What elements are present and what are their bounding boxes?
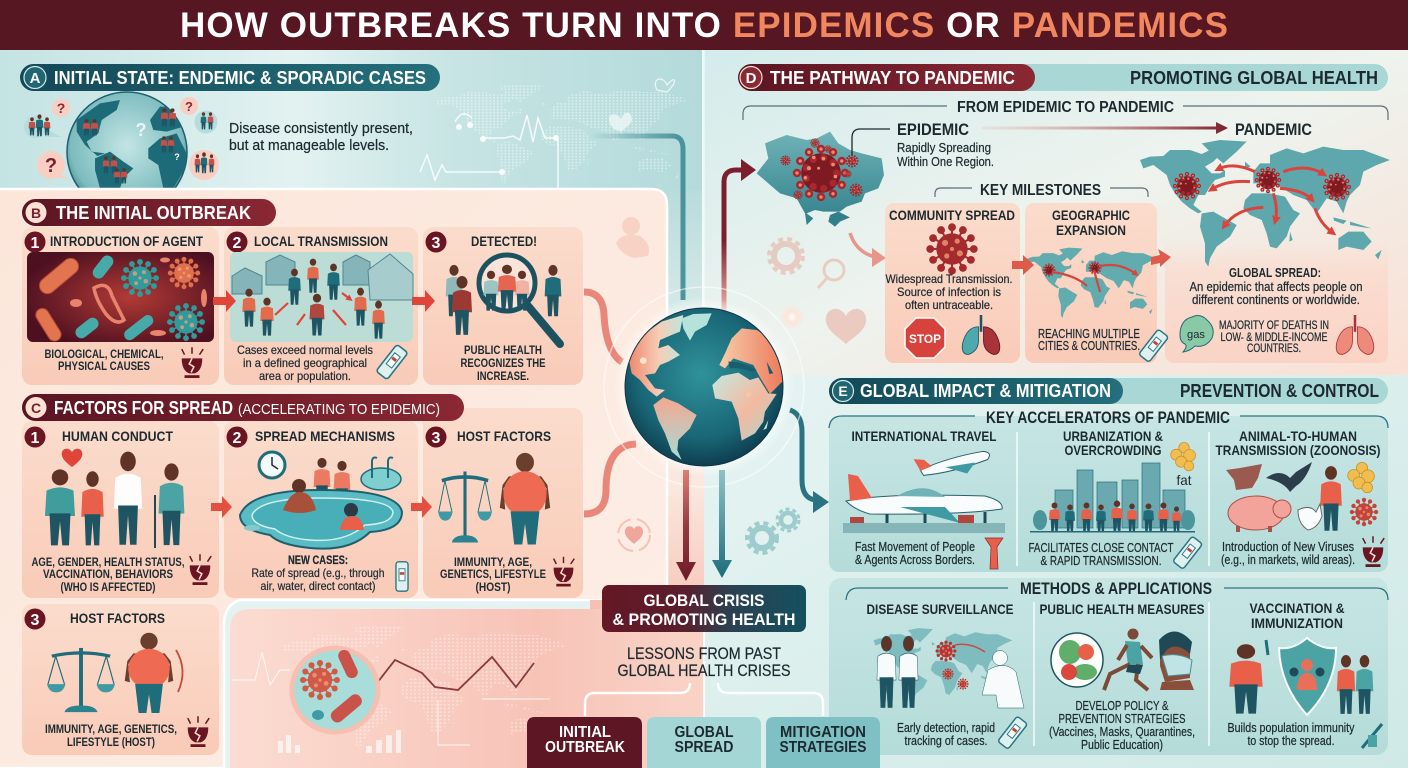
subheading: from epidemic to pandemic: FROM EPIDEMIC TO PANDEMIC: [957, 99, 1174, 116]
text: epidemic: Rapidly Spreading: [897, 140, 991, 155]
icon: globe with sporadic cases: ?: [136, 120, 146, 140]
icon: globe with sporadic cases: [66, 91, 188, 188]
card: introduction of agent: BIOLOGICAL, CHEMICAL,: [44, 347, 164, 361]
card: spread mechanisms: Rate of spread (e.g., through: [252, 566, 384, 580]
text: section A description: Disease consistently present,: [229, 120, 413, 137]
text: section A description: but at manageable levels.: [229, 137, 389, 154]
column: disease surveillance: Early detection, rapid: [897, 721, 995, 735]
subheading: key milestones: [935, 182, 1148, 199]
box: global spread: [647, 717, 761, 768]
box: initial outbreak: OUTBREAK: [545, 739, 625, 756]
card: host factors: HOST FACTORS: [457, 428, 551, 444]
arrow: community to geographic: [1012, 255, 1034, 275]
card: host factors: GENETICS, LIFESTYLE: [440, 567, 546, 581]
title banner: HOW OUTBREAKS TURN INTO EPIDEMICS OR PANDEMICS: [180, 6, 1228, 45]
column: international travel: & Agents Across Borders.: [855, 553, 975, 567]
column: international travel: INTERNATIONAL TRAVEL: [852, 428, 997, 444]
globe centerpiece: [604, 287, 805, 487]
column: urbanization: & RAPID TRANSMISSION.: [1040, 554, 1162, 568]
box: mitigation strategies: MITIGATION: [780, 724, 866, 741]
card: lower host factors: 3: [31, 612, 40, 629]
column: international travel: [843, 428, 1005, 569]
column: zoonosis: TRANSMISSION (ZOONOSIS): [1216, 442, 1380, 458]
arrow: outbreak connector to globe: [584, 292, 622, 362]
card: lower host factors: [22, 604, 219, 755]
column: vaccination: [1228, 600, 1382, 748]
icon: petri dish: [292, 648, 378, 732]
card: spread mechanisms: 2: [233, 430, 242, 447]
icon: plate of vegetables: [1051, 633, 1103, 687]
arrow: teal connector from section A to globe: [590, 136, 683, 300]
panel: bottom center lessons chart: [230, 609, 704, 768]
card: global spread: LOW- & MIDDLE-INCOME: [1220, 332, 1328, 344]
card: community spread: often untraceable.: [905, 298, 993, 312]
heading pill A: A: [30, 70, 41, 87]
icon: gas cloud: gas: [1187, 329, 1205, 341]
icon: case bubbles: [24, 97, 219, 180]
decorative icon: heart monitor: [618, 519, 650, 551]
heading band E: E: [838, 383, 848, 399]
column: urbanization: FACILITATES CLOSE CONTACT: [1028, 541, 1174, 555]
icon: stop sign: STOP: [909, 332, 941, 346]
box: initial outbreak: [527, 717, 642, 768]
panel: methods and applications: [829, 578, 1388, 755]
icon: mortar: [1363, 536, 1384, 567]
card: introduction of agent: INTRODUCTION OF AGENT: [50, 233, 203, 249]
icon: lungs: [962, 315, 1000, 354]
text: fat label: fat: [1176, 472, 1192, 488]
icon: case bubbles: ?: [45, 155, 57, 177]
icon: mortar: [182, 347, 203, 378]
illustration: pool: [240, 452, 402, 549]
card: host factors tall background: [423, 408, 583, 598]
column: disease surveillance: [866, 601, 1028, 749]
map: mini world: [1027, 248, 1157, 318]
card: host factors: (HOST): [476, 580, 511, 594]
arrow: maroon up-arrow to section D: [724, 159, 756, 310]
tree connector to bottom boxes: [585, 683, 823, 716]
heading pill B: THE INITIAL OUTBREAK: [56, 203, 251, 223]
icon: case bubbles: ?: [185, 99, 193, 114]
heading band D: D: [746, 70, 757, 87]
card: local transmission: in a defined geographical: [243, 356, 367, 370]
column: public health measures: Public Education): [1081, 738, 1163, 752]
card: human conduct: 1: [31, 430, 40, 447]
map: epidemic region: [757, 129, 890, 227]
title banner: [0, 0, 1408, 50]
decorative icon: heart figure: [616, 217, 649, 258]
icon: balance scale: [47, 648, 115, 712]
card: introduction of agent: [22, 227, 219, 385]
panel: peach background for sections B and C: [0, 189, 667, 768]
card: spread mechanisms: NEW CASES:: [288, 553, 348, 567]
icon: test strip: [376, 344, 408, 380]
card: human conduct: (WHO IS AFFECTED): [60, 580, 156, 594]
heading pill C: (ACCELERATING TO EPIDEMIC): [238, 401, 440, 418]
icon: gas cloud: [1180, 316, 1213, 352]
card: introduction of agent: PHYSICAL CAUSES: [58, 359, 150, 373]
icon: test strip: [998, 716, 1028, 749]
column: disease surveillance: tracking of cases.: [904, 734, 988, 748]
decorative icons: gear, magnifier, heart: [769, 239, 866, 344]
arrow: card 2 to card 3: [412, 290, 435, 312]
card: detected: DETECTED!: [471, 233, 537, 249]
card: global spread: [1140, 140, 1390, 363]
card: host factors: IMMUNITY, AGE,: [454, 555, 532, 569]
decorative hearts: [609, 79, 675, 132]
chart: outbreak line: [377, 657, 534, 690]
card: community spread: [885, 203, 1020, 363]
icon: airliner on ground: [843, 474, 1005, 533]
card: global spread: MAJORITY OF DEATHS IN: [1219, 320, 1329, 332]
card: community spread: Widespread Transmission.: [886, 272, 1012, 286]
arrow: teal connector to section E: [790, 410, 815, 500]
heading pill C: FACTORS FOR SPREAD: [54, 398, 233, 418]
panel: section C factors for spread: [22, 394, 583, 598]
icon: test device: [396, 562, 408, 591]
column: zoonosis: (e.g., in markets, wild areas).: [1221, 553, 1355, 567]
card: geographic expansion: GEOGRAPHIC: [1052, 208, 1130, 223]
decorative icon: gears: [747, 509, 799, 553]
card: spread mechanisms: [224, 421, 418, 598]
card: global spread: COUNTRIES.: [1247, 343, 1301, 355]
panel: section A initial state: [20, 64, 440, 188]
icon: balance scale: [438, 471, 492, 543]
arrow: region to community spread: [850, 233, 886, 267]
column: vaccination: VACCINATION &: [1250, 600, 1344, 616]
column: public health measures: (Vaccines, Masks, Quarantines,: [1049, 725, 1195, 739]
heading pill A: INITIAL STATE: ENDEMIC & SPORADIC CASES: [54, 68, 426, 88]
icon: test strip: [1173, 536, 1203, 569]
illustration: surveillance team and map: [874, 628, 1024, 708]
decorative dots: [456, 122, 559, 175]
card: detected: [423, 227, 583, 385]
callout: global crisis box: [602, 585, 806, 632]
card: detected: PUBLIC HEALTH: [464, 343, 542, 357]
heading band E: GLOBAL IMPACT & MITIGATION: [860, 381, 1111, 401]
icon: mortar: [554, 557, 574, 586]
card: human conduct: HUMAN CONDUCT: [62, 428, 173, 444]
arrow: card 1 to card 2: [213, 290, 236, 312]
card: local transmission: LOCAL TRANSMISSION: [254, 233, 388, 249]
card: human conduct: AGE, GENDER, HEALTH STATUS,: [32, 555, 184, 569]
card: global spread: different continents or worldwide.: [1192, 293, 1360, 307]
panel: section E global impact and mitigation: [747, 378, 1388, 755]
card: human conduct: [22, 421, 219, 598]
text: epidemic: EPIDEMIC: [897, 120, 969, 139]
card: host factors: 3: [432, 430, 441, 447]
icon: masked face: [1159, 631, 1194, 690]
decorative world map behind section A: [435, 84, 690, 185]
icon: fat cells: [1171, 442, 1196, 471]
text: lessons from past crises: GLOBAL HEALTH CRISES: [618, 661, 790, 680]
icon: flying plane: [914, 442, 992, 484]
icon: test strip: [1139, 329, 1169, 362]
callout: global crisis box: GLOBAL CRISIS: [644, 591, 764, 610]
heading pill B: B: [31, 205, 41, 221]
illustration: microbes: [27, 252, 214, 343]
column: urbanization: OVERCROWDING: [1064, 442, 1162, 458]
text: lessons from past crises: LESSONS FROM PAST: [627, 644, 781, 663]
column: public health measures: PUBLIC HEALTH MEASURES: [1040, 601, 1204, 617]
column: urbanization: URBANIZATION &: [1063, 428, 1163, 444]
panel: methods and applications: METHODS & APPLICATIONS: [1020, 580, 1212, 598]
box: global spread: SPREAD: [674, 739, 734, 756]
arrow: teal arrow down to crisis box: [712, 470, 732, 578]
icon: lungs: [1336, 315, 1374, 354]
icon: syringe: [1362, 724, 1382, 748]
panel: section D pathway to pandemic: [738, 64, 1390, 363]
illustration: magnifier over people: [446, 255, 561, 344]
icon: funnel: [985, 538, 1003, 569]
icon: person with obesity: [500, 453, 550, 545]
text: epidemic: [897, 120, 994, 169]
card: spread mechanisms: SPREAD MECHANISMS: [255, 428, 395, 444]
heading band D: THE PATHWAY TO PANDEMIC: [770, 68, 1015, 88]
card: spread mechanisms: air, water, direct contact): [260, 579, 376, 593]
heading band E: [829, 378, 1388, 404]
card: local transmission: [224, 227, 418, 385]
card: host factors: [426, 426, 574, 594]
text: epidemic: Within One Region.: [897, 154, 994, 169]
card: geographic expansion: REACHING MULTIPLE: [1038, 327, 1140, 341]
heading pill C: C: [31, 400, 41, 416]
column: vaccination: Builds population immunity: [1228, 721, 1355, 735]
card: community spread: COMMUNITY SPREAD: [889, 208, 1015, 223]
icon: case bubbles: ?: [57, 100, 65, 116]
subheading: key milestones: KEY MILESTONES: [980, 182, 1101, 199]
illustration: neighbourhood: [230, 252, 413, 342]
illustration: four people: [45, 449, 184, 548]
card: local transmission: area or population.: [259, 369, 351, 383]
box: mitigation strategies: STRATEGIES: [780, 739, 867, 756]
panel: key accelerators: KEY ACCELERATORS OF PANDEMIC: [986, 409, 1230, 427]
icon: person with obesity: [125, 633, 173, 713]
icon: stop sign: [905, 318, 945, 358]
card: detected: RECOGNIZES THE: [460, 356, 546, 370]
card: lower host factors: LIFESTYLE (HOST): [67, 735, 155, 749]
box: mitigation strategies: [766, 717, 880, 768]
text: pandemic: PANDEMIC: [1235, 120, 1312, 139]
column: disease surveillance: DISEASE SURVEILLANCE: [866, 601, 1014, 617]
column: public health measures: PREVENTION STRATEGIES: [1058, 712, 1186, 726]
heading band D: [738, 64, 1388, 91]
column: public health measures: [1040, 601, 1204, 752]
column: international travel: Fast Movement of People: [855, 540, 975, 554]
heading band D: PROMOTING GLOBAL HEALTH: [1130, 68, 1378, 88]
icon: mortar: [188, 716, 209, 747]
subheading: from epidemic to pandemic: [743, 99, 1388, 120]
column: zoonosis: [1216, 428, 1384, 567]
card: local transmission: 2: [233, 235, 242, 252]
map: pandemic world: [1140, 140, 1390, 267]
decorative heartbeat lines: [420, 114, 558, 190]
card: community spread: Source of infection is: [897, 285, 1001, 299]
illustration: city and crowd: [1030, 463, 1195, 532]
heading pill B: [22, 199, 276, 226]
arrow: factor 1 to factor 2: [211, 496, 232, 518]
card: geographic expansion: CITIES & COUNTRIES.: [1038, 339, 1140, 353]
box: global spread: GLOBAL: [674, 724, 734, 741]
card: lower host factors: HOST FACTORS: [70, 610, 165, 626]
card: introduction of agent: 1: [31, 235, 40, 252]
heading pill C: [22, 394, 464, 421]
arrowhead: teal pointing into accelerators: [813, 491, 829, 513]
card: geographic expansion: [1025, 203, 1157, 363]
column: vaccination: to stop the spread.: [1248, 734, 1334, 748]
card: human conduct: VACCINATION, BEHAVIORS: [43, 567, 173, 581]
arrow: epidemic to pandemic: [982, 122, 1228, 134]
text: section A description: [229, 120, 413, 154]
card: detected: 3: [432, 235, 441, 252]
divider under crisis box: [703, 632, 705, 717]
column: zoonosis: Introduction of New Viruses: [1222, 540, 1354, 554]
column: zoonosis: ANIMAL-TO-HUMAN: [1239, 428, 1357, 444]
panel: section B initial outbreak: [22, 199, 583, 385]
icon: virus: [926, 223, 978, 275]
panel: key accelerators: [829, 409, 1388, 572]
card: global spread: GLOBAL SPREAD:: [1229, 265, 1321, 280]
card: detected: INCREASE.: [477, 369, 529, 383]
arrow: maroon arrow down to crisis box: [676, 470, 696, 581]
icon: runner: [1104, 628, 1152, 690]
icon: mortar: [190, 554, 211, 585]
column: urbanization: [1028, 428, 1203, 569]
illustration: animals and human: [1226, 462, 1378, 532]
heading band E: PREVENTION & CONTROL: [1180, 381, 1379, 401]
chart: bars: [278, 730, 401, 753]
card: local transmission: Cases exceed normal levels: [237, 343, 373, 357]
callout: global crisis box: & PROMOTING HEALTH: [612, 610, 796, 629]
card: global spread: An epidemic that affects people on: [1190, 280, 1363, 294]
text: lessons from past crises: [618, 644, 790, 680]
illustration: vaccinated person and shield: [1229, 638, 1373, 715]
arrow: geographic to global: [1151, 249, 1171, 267]
arrow: factors connector to globe: [584, 444, 636, 514]
card: lower host factors: IMMUNITY, AGE, GENETICS,: [45, 722, 177, 736]
panel: lower centre background: [590, 600, 704, 768]
column: public health measures: DEVELOP POLICY &: [1076, 699, 1169, 713]
box: initial outbreak: INITIAL: [559, 724, 611, 741]
arrow: factor 2 to factor 3: [411, 496, 432, 518]
card: geographic expansion: EXPANSION: [1056, 223, 1126, 238]
icon: globe with sporadic cases: ?: [174, 152, 180, 162]
column: vaccination: IMMUNIZATION: [1251, 615, 1343, 631]
heading pill A: [20, 64, 440, 91]
